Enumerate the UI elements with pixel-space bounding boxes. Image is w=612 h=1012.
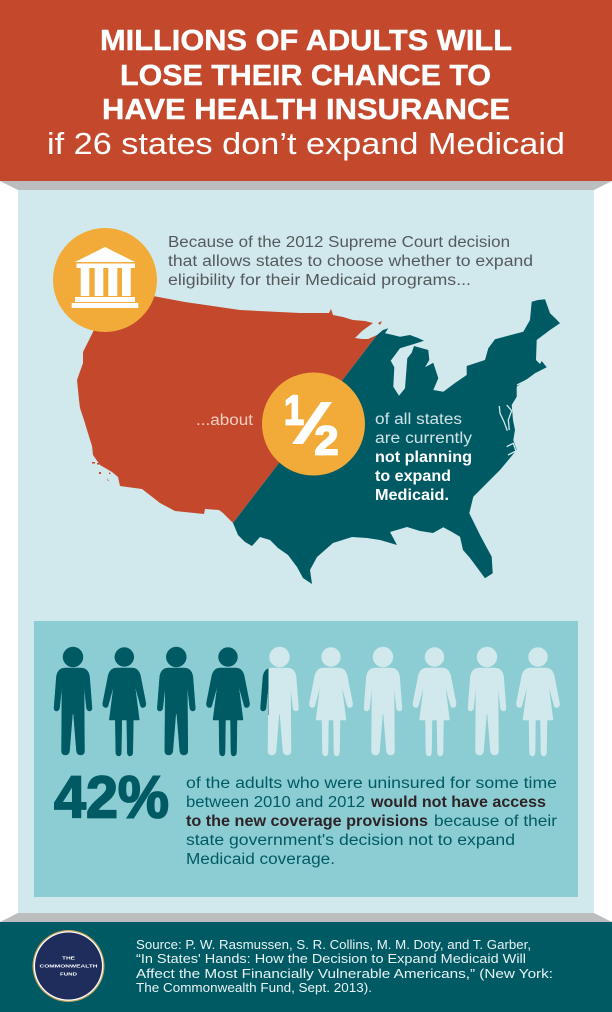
logo: The Commonwealth Fund	[32, 930, 104, 1002]
map statement text	[375, 411, 472, 504]
statistic description: Medicaid coverage.	[186, 851, 335, 868]
footer fold shadow	[0, 913, 612, 922]
logo: The Commonwealth Fund: COMMONWEALTH	[40, 964, 98, 970]
statistic description: state government's decision not to expand	[186, 832, 515, 849]
intro text: that allows states to choose whether to expand	[168, 253, 533, 270]
one-half badge	[262, 372, 365, 476]
source citation: “In States' Hands: How the Decision to Expand Medicaid Will	[136, 952, 526, 966]
map: western states in red	[77, 275, 382, 523]
header banner	[0, 0, 612, 181]
statistic description: of the adults who were uninsured for some time	[186, 775, 557, 792]
label: about: ...about	[196, 412, 254, 429]
statistic description: because of their	[434, 813, 557, 830]
one-half badge: 2	[314, 418, 338, 464]
map statement text: are currently	[375, 430, 472, 447]
title: third line: HAVE HEALTH INSURANCE	[102, 94, 510, 126]
statistic description: to the new coverage provisions	[186, 813, 428, 830]
intro text: Because of the 2012 Supreme Court decision	[168, 234, 510, 251]
map statement text: to expand	[375, 468, 451, 485]
footer	[0, 922, 612, 1012]
icon: government building	[53, 228, 157, 332]
statistic description: between 2010 and 2012	[186, 794, 365, 811]
map of the United States	[77, 275, 560, 584]
subtitle: if 26 states don’t expand Medicaid	[47, 126, 565, 161]
source citation: Source: P. W. Rasmussen, S. R. Collins, M. M. Doty, and T. Garber,	[136, 938, 531, 952]
pictogram: ten people	[54, 647, 560, 756]
map: eastern states in teal	[233, 299, 560, 584]
big number: 42%	[54, 764, 169, 830]
intro text	[168, 234, 533, 289]
statistic description: would not have access	[370, 794, 546, 811]
title: second line: LOSE THEIR CHANCE TO	[120, 60, 491, 92]
map statement text: Medicaid.	[375, 487, 449, 504]
logo: The Commonwealth Fund: FUND	[60, 972, 78, 978]
title: first line: MILLIONS OF ADULTS WILL	[100, 25, 512, 57]
one-half badge: 1	[284, 386, 304, 434]
source citation: Affect the Most Financially Vulnerable Americans,” (New York:	[136, 967, 553, 981]
intro text: eligibility for their Medicaid programs...	[168, 272, 471, 289]
header fold shadow	[0, 181, 612, 190]
map statement text: not planning	[375, 449, 472, 466]
panel: 42 percent statistic	[34, 621, 578, 897]
source citation: The Commonwealth Fund, Sept. 2013).	[136, 981, 372, 995]
statistic description	[186, 775, 557, 868]
map: island details	[92, 321, 382, 481]
light background panel	[18, 185, 594, 917]
source citation	[136, 938, 553, 995]
map statement text: of all states	[375, 411, 462, 428]
map: coastal water details	[499, 378, 531, 455]
logo: The Commonwealth Fund: THE	[62, 956, 76, 962]
